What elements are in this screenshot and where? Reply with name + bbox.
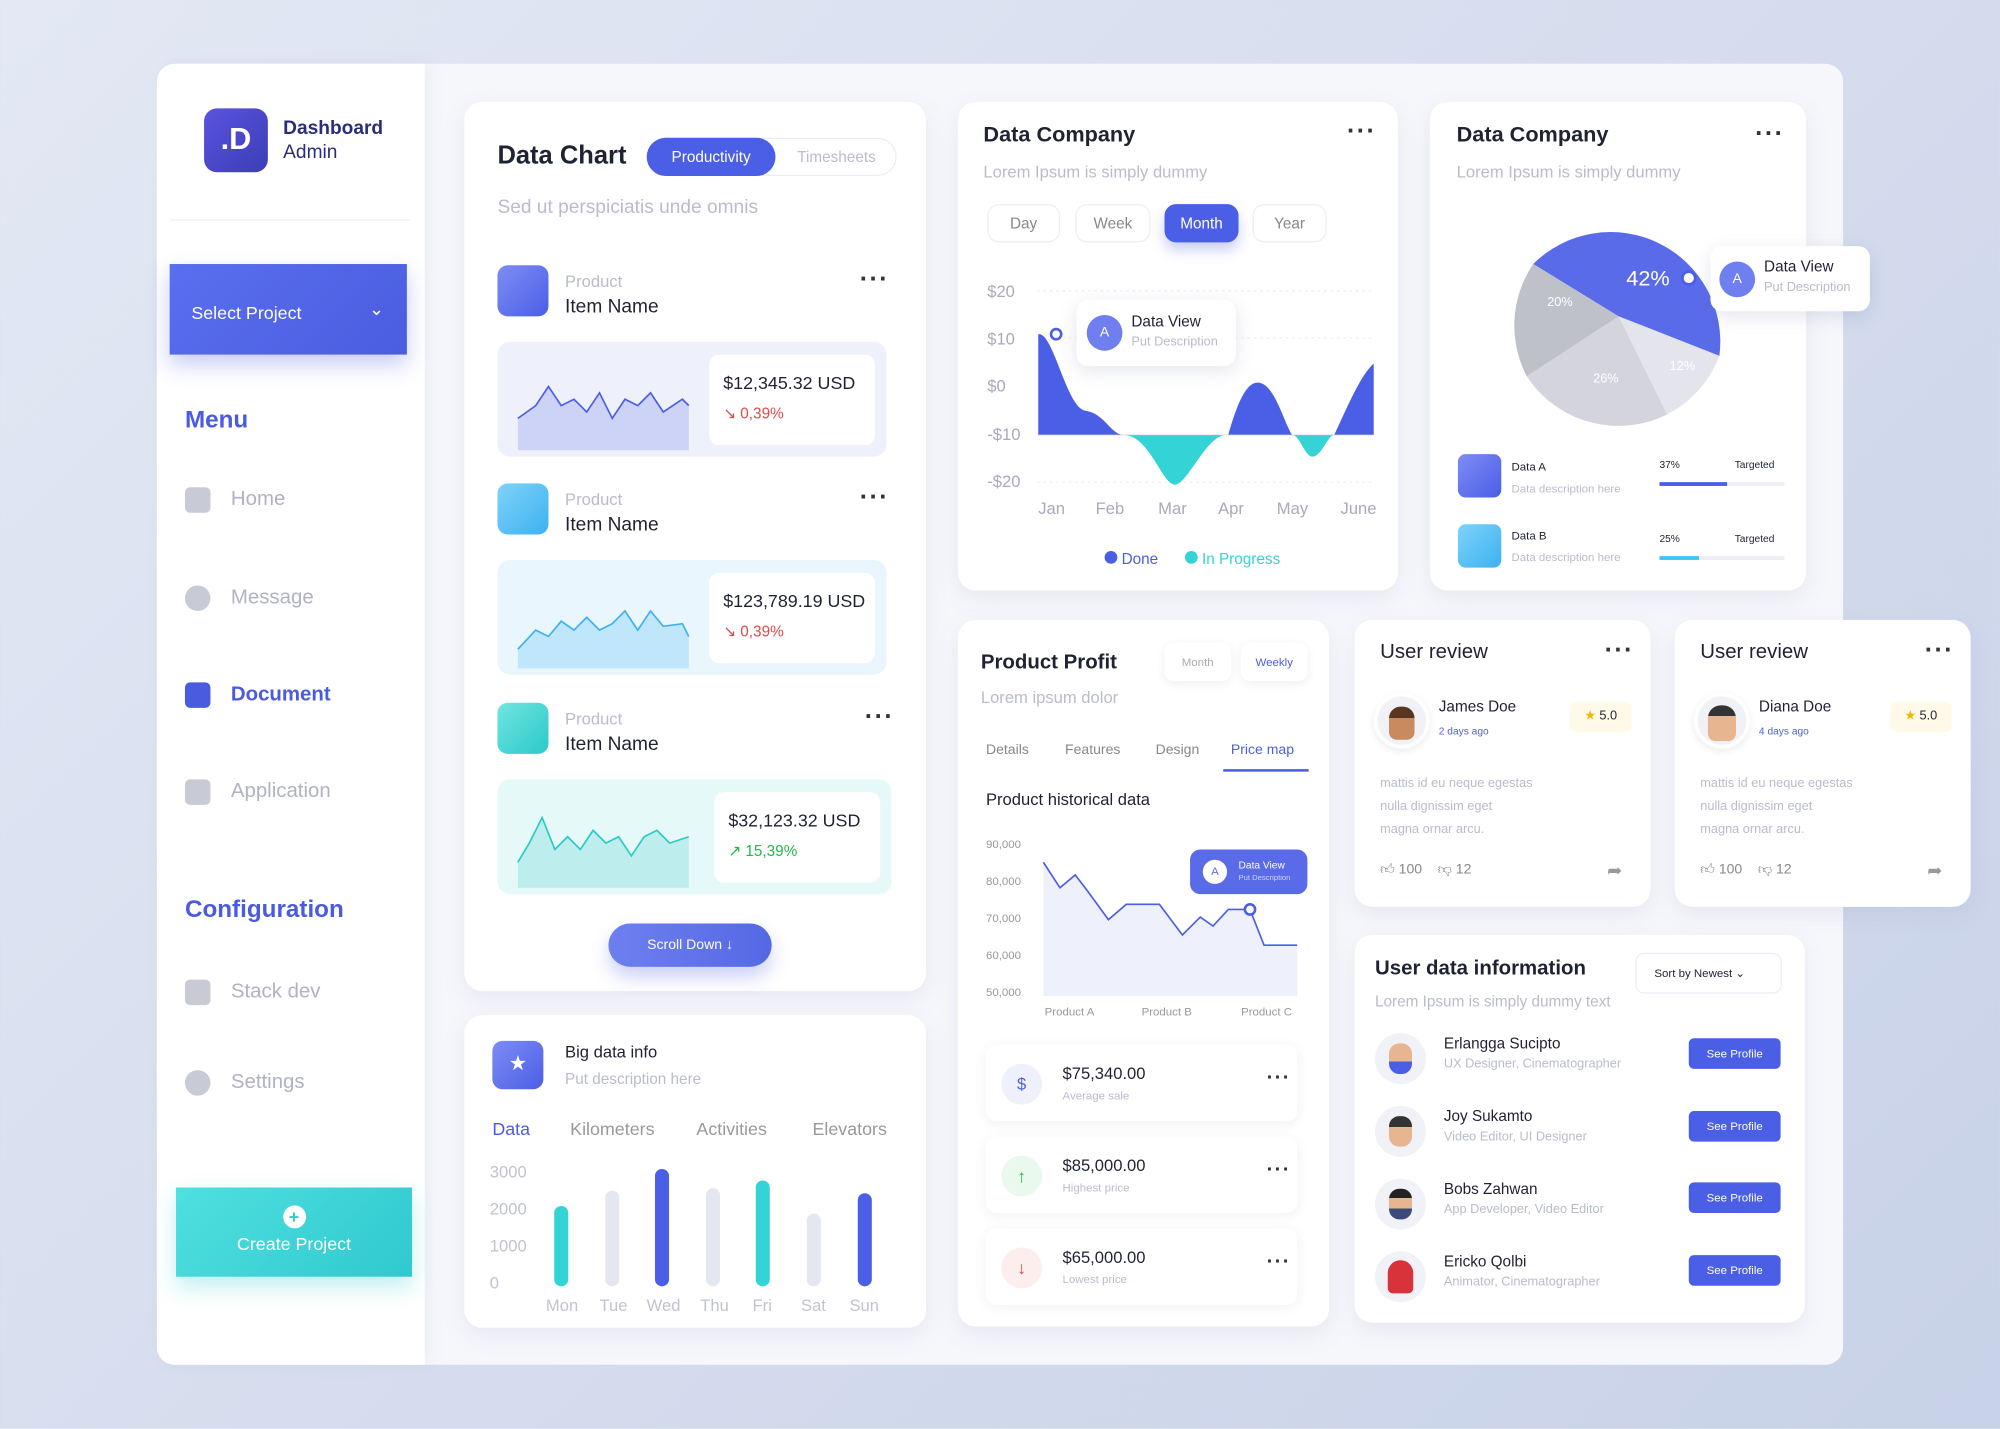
tooltip: Put Description — [1131, 335, 1218, 349]
logo: .D — [221, 122, 251, 157]
panel: data company pie: Data A — [1511, 460, 1546, 473]
panel: user review 2: ➦ — [1927, 860, 1942, 880]
area chart: Jan — [1038, 499, 1065, 518]
line chart: Product A — [1045, 1006, 1095, 1018]
area chart: $20 — [987, 282, 1015, 301]
panel: user review 1: 2 days ago — [1439, 726, 1489, 737]
legend — [1104, 550, 1158, 568]
bar chart: 3000 — [490, 1162, 527, 1181]
panel: user review 1: ★ 5.0 — [1584, 709, 1617, 723]
panel: product profit: Product Profit — [981, 652, 1117, 673]
panel: data company pie: 37% — [1659, 459, 1680, 471]
panel: big data info: ★ — [509, 1054, 527, 1075]
panel: data company line — [958, 102, 1398, 591]
line chart: 70,000 — [986, 913, 1021, 925]
select project: ⌄ — [369, 298, 384, 319]
area chart: Apr — [1218, 499, 1244, 518]
data rows — [1458, 454, 1501, 497]
stat rows: $ — [1017, 1074, 1026, 1093]
panel: user review 1: User review — [1380, 642, 1488, 663]
panel: product profit: ··· — [1267, 1251, 1291, 1273]
panel: data company line: ··· — [1347, 117, 1376, 145]
product rows: ↘ 0,39% — [723, 404, 784, 422]
area chart: Feb — [1096, 499, 1124, 518]
panel: data company line: Data Company — [983, 122, 1135, 147]
pie chart: 42% — [1626, 266, 1670, 291]
line chart — [986, 839, 1298, 1018]
pie tooltip: Put Description — [1764, 281, 1851, 295]
panel: data chart: ··· — [860, 483, 889, 511]
panel: data chart: ··· — [865, 703, 894, 731]
product rows: $12,345.32 USD — [723, 372, 855, 393]
panel: data company pie: Targeted — [1735, 459, 1774, 471]
select project: Select Project — [191, 302, 301, 323]
panel: product profit: Features — [1065, 742, 1120, 758]
create project — [176, 1187, 412, 1277]
panel: user review 1: mattis id eu neque egestas — [1380, 777, 1533, 791]
bar chart — [490, 1162, 879, 1315]
panel: user data information: User data information — [1375, 958, 1586, 980]
stat rows: ··· — [1267, 1068, 1291, 1089]
text: Message — [231, 587, 314, 608]
panel: data chart — [464, 102, 926, 991]
panel: user review 2: Diana Doe — [1759, 698, 1831, 716]
panel: data company line: Week — [1093, 214, 1132, 232]
panel: user data information: Joy Sukamto — [1444, 1107, 1532, 1125]
pie tooltip: A — [1733, 272, 1742, 287]
panel: data company line: In Progress — [1202, 550, 1280, 568]
panel: data company pie — [1430, 102, 1806, 591]
area chart — [987, 282, 1377, 518]
bar chart: Sun — [849, 1296, 879, 1315]
pie chart: 12% — [1670, 358, 1695, 373]
panel: user data information: See Profile — [1707, 1264, 1763, 1277]
area chart: -$10 — [987, 425, 1020, 444]
panel: user review 2: 4 days ago — [1759, 726, 1809, 737]
panel: user data information: Bobs Zahwan — [1444, 1180, 1537, 1198]
logo: Dashboard — [283, 117, 383, 139]
pie tooltip: Data View — [1764, 258, 1834, 276]
panel: data chart: Productivity — [672, 148, 751, 166]
panel: product profit: Weekly — [1256, 656, 1293, 668]
area chart: $0 — [987, 377, 1006, 396]
pie tooltip — [1710, 246, 1870, 311]
area chart: June — [1341, 499, 1377, 518]
line chart: 80,000 — [986, 876, 1021, 888]
bar chart: Tue — [599, 1296, 627, 1315]
panel: data chart: Timesheets — [797, 148, 876, 166]
panel: data chart: ↘ 0,39% — [723, 622, 784, 640]
text: Settings — [231, 1071, 305, 1093]
panel: user review 1: James Doe — [1439, 698, 1516, 716]
panel: product profit — [958, 620, 1329, 1327]
text: Stack dev — [231, 981, 320, 1003]
panel: user review 2: 👍︎ 100 👎︎ 12 — [1700, 862, 1792, 878]
panel: product profit: Design — [1156, 742, 1199, 758]
panel: user review 1: magna ornar arcu. — [1380, 823, 1484, 837]
panel: data chart: $32,123.32 USD — [728, 810, 860, 830]
panel: data chart: Product — [565, 490, 622, 509]
panel: big data info: Big data info — [565, 1042, 657, 1061]
configuration heading: Configuration — [185, 897, 344, 923]
panel: user review 2: ··· — [1925, 636, 1954, 665]
panel: data company pie: Data B — [1511, 529, 1547, 542]
bar chart: 1000 — [490, 1236, 527, 1255]
panel: data company pie: Data description here — [1511, 551, 1621, 564]
panel: data chart: Data Chart — [497, 142, 626, 170]
bar chart: Sat — [801, 1296, 826, 1315]
panel: product profit: Month — [1182, 656, 1214, 668]
bar chart: Mon — [546, 1296, 578, 1315]
text: Application — [231, 781, 331, 802]
bar chart: Fri — [753, 1296, 772, 1315]
stat rows: Average sale — [1062, 1089, 1129, 1102]
panel: product profit: Lorem ipsum dolor — [981, 687, 1118, 707]
panel: user review 2 — [1675, 620, 1971, 907]
legend: Done — [1122, 550, 1158, 568]
panel: user review 1: nulla dignissim eget — [1380, 800, 1492, 814]
panel: big data info: Put description here — [565, 1070, 701, 1088]
create project: Create Project — [237, 1233, 351, 1254]
panel: data chart: $123,789.19 USD — [723, 591, 865, 611]
text: Document — [231, 684, 331, 705]
panel: product profit: ↓ — [1017, 1258, 1026, 1278]
panel: user data information: App Developer, Video Editor — [1444, 1203, 1604, 1217]
panel: data chart: Sed ut perspiciatis unde omnis — [497, 196, 758, 218]
panel: product profit: Data View — [1239, 860, 1285, 871]
logo: Admin — [283, 142, 337, 163]
panel: user review 1: ··· — [1605, 636, 1634, 665]
panel: user review 2: mattis id eu neque egestas — [1700, 777, 1853, 791]
stat rows: $75,340.00 — [1062, 1064, 1146, 1083]
stat rows — [986, 1045, 1297, 1121]
panel: user data information: See Profile — [1707, 1120, 1763, 1133]
panel: user data information: See Profile — [1707, 1047, 1763, 1060]
panel: data company line: Day — [1010, 214, 1037, 232]
create project: + — [289, 1207, 299, 1227]
panel: data chart: Product — [565, 709, 622, 728]
panel: product profit: ··· — [1267, 1159, 1291, 1181]
product rows — [497, 265, 889, 456]
panel: user review 1 — [1355, 620, 1651, 907]
panel: user data information: Erlangga Sucipto — [1444, 1034, 1560, 1052]
panel: product profit: $65,000.00 — [1062, 1247, 1146, 1267]
sidebar — [157, 64, 425, 1365]
panel: user review 1: ➦ — [1607, 860, 1622, 880]
product rows: Product — [565, 272, 622, 291]
panel: user review 2: ★ 5.0 — [1905, 709, 1937, 723]
panel: product profit: Details — [986, 742, 1029, 758]
pie chart: 20% — [1547, 294, 1573, 309]
tooltip: A — [1100, 325, 1109, 341]
tooltip — [1077, 300, 1236, 366]
line chart: Product B — [1142, 1006, 1192, 1018]
panel: big data info: Elevators — [812, 1119, 887, 1139]
menu items — [185, 487, 285, 513]
panel: user data information — [1355, 935, 1805, 1323]
main panel — [157, 64, 1843, 1365]
panel: big data info: Kilometers — [570, 1119, 655, 1139]
bar chart: 2000 — [490, 1199, 527, 1218]
panel: data chart: Item Name — [565, 514, 659, 536]
bar chart: Thu — [700, 1296, 729, 1315]
pie chart — [1514, 232, 1720, 426]
area chart: -$20 — [987, 472, 1020, 491]
panel: data company pie: 25% — [1659, 533, 1680, 545]
line chart: 90,000 — [986, 839, 1021, 851]
panel: product profit: ↑ — [1017, 1166, 1026, 1186]
menu items: Home — [231, 489, 285, 510]
bar chart: 0 — [490, 1273, 499, 1292]
panel: big data info: Data — [492, 1119, 530, 1139]
line chart: Product C — [1241, 1006, 1292, 1018]
panel: data company pie: Data Company — [1457, 122, 1608, 147]
panel: product profit: $85,000.00 — [1062, 1156, 1146, 1175]
panel: user data information: See Profile — [1707, 1191, 1763, 1204]
panel: data company pie: Lorem Ipsum is simply dummy — [1457, 162, 1681, 181]
scroll down button: Scroll Down ↓ — [647, 937, 733, 953]
panel: big data info — [464, 1015, 926, 1328]
area chart: May — [1277, 499, 1309, 518]
line chart: 50,000 — [986, 987, 1021, 999]
panel: user data information: Animator, Cinematographer — [1444, 1276, 1600, 1290]
panel: user review 2: magna ornar arcu. — [1700, 823, 1804, 837]
logo — [204, 108, 383, 172]
panel: user review 1: 👍︎ 100 👎︎ 12 — [1380, 862, 1471, 878]
panel: data chart: ↗ 15,39% — [728, 842, 797, 860]
panel: data company pie: Targeted — [1735, 533, 1774, 545]
line chart: 60,000 — [986, 950, 1021, 962]
panel: data company pie: Data description here — [1511, 482, 1621, 495]
tooltip: Data View — [1131, 312, 1201, 330]
scroll down button — [608, 923, 772, 967]
panel: user data information: Video Editor, UI Designer — [1444, 1130, 1587, 1144]
panel: product profit: Product historical data — [986, 790, 1150, 809]
panel: product profit: Highest price — [1062, 1181, 1130, 1194]
product rows: Item Name — [565, 296, 659, 318]
area chart: $10 — [987, 329, 1015, 348]
panel: data company line: Month — [1180, 214, 1223, 232]
product rows: ··· — [860, 265, 889, 293]
panel: data chart: Item Name — [565, 733, 659, 755]
panel: user data information: Lorem Ipsum is simply dummy text — [1375, 992, 1611, 1010]
panel: user data information: Ericko Qolbi — [1444, 1253, 1526, 1270]
panel: user review 2: User review — [1700, 642, 1808, 663]
panel: product profit: Put Description — [1239, 875, 1290, 883]
select project — [170, 264, 407, 355]
menu heading: Menu — [185, 407, 248, 434]
panel: big data info: Activities — [696, 1119, 767, 1139]
panel: data company line: Year — [1274, 214, 1305, 232]
panel: data company pie: ··· — [1755, 120, 1784, 148]
area chart: Mar — [1158, 499, 1187, 518]
panel: user data information: Sort by Newest ⌄ — [1654, 967, 1745, 980]
panel: user review 2: nulla dignissim eget — [1700, 800, 1812, 814]
panel: product profit: A — [1211, 865, 1219, 878]
pie chart: 26% — [1593, 371, 1619, 386]
panel: product profit: Lowest price — [1062, 1273, 1127, 1286]
panel: product profit: Price map — [1231, 742, 1294, 758]
panel: data company line: Lorem Ipsum is simply dummy — [983, 162, 1207, 181]
panel: user data information: UX Designer, Cinematographer — [1444, 1057, 1621, 1071]
bar chart: Wed — [647, 1296, 680, 1315]
